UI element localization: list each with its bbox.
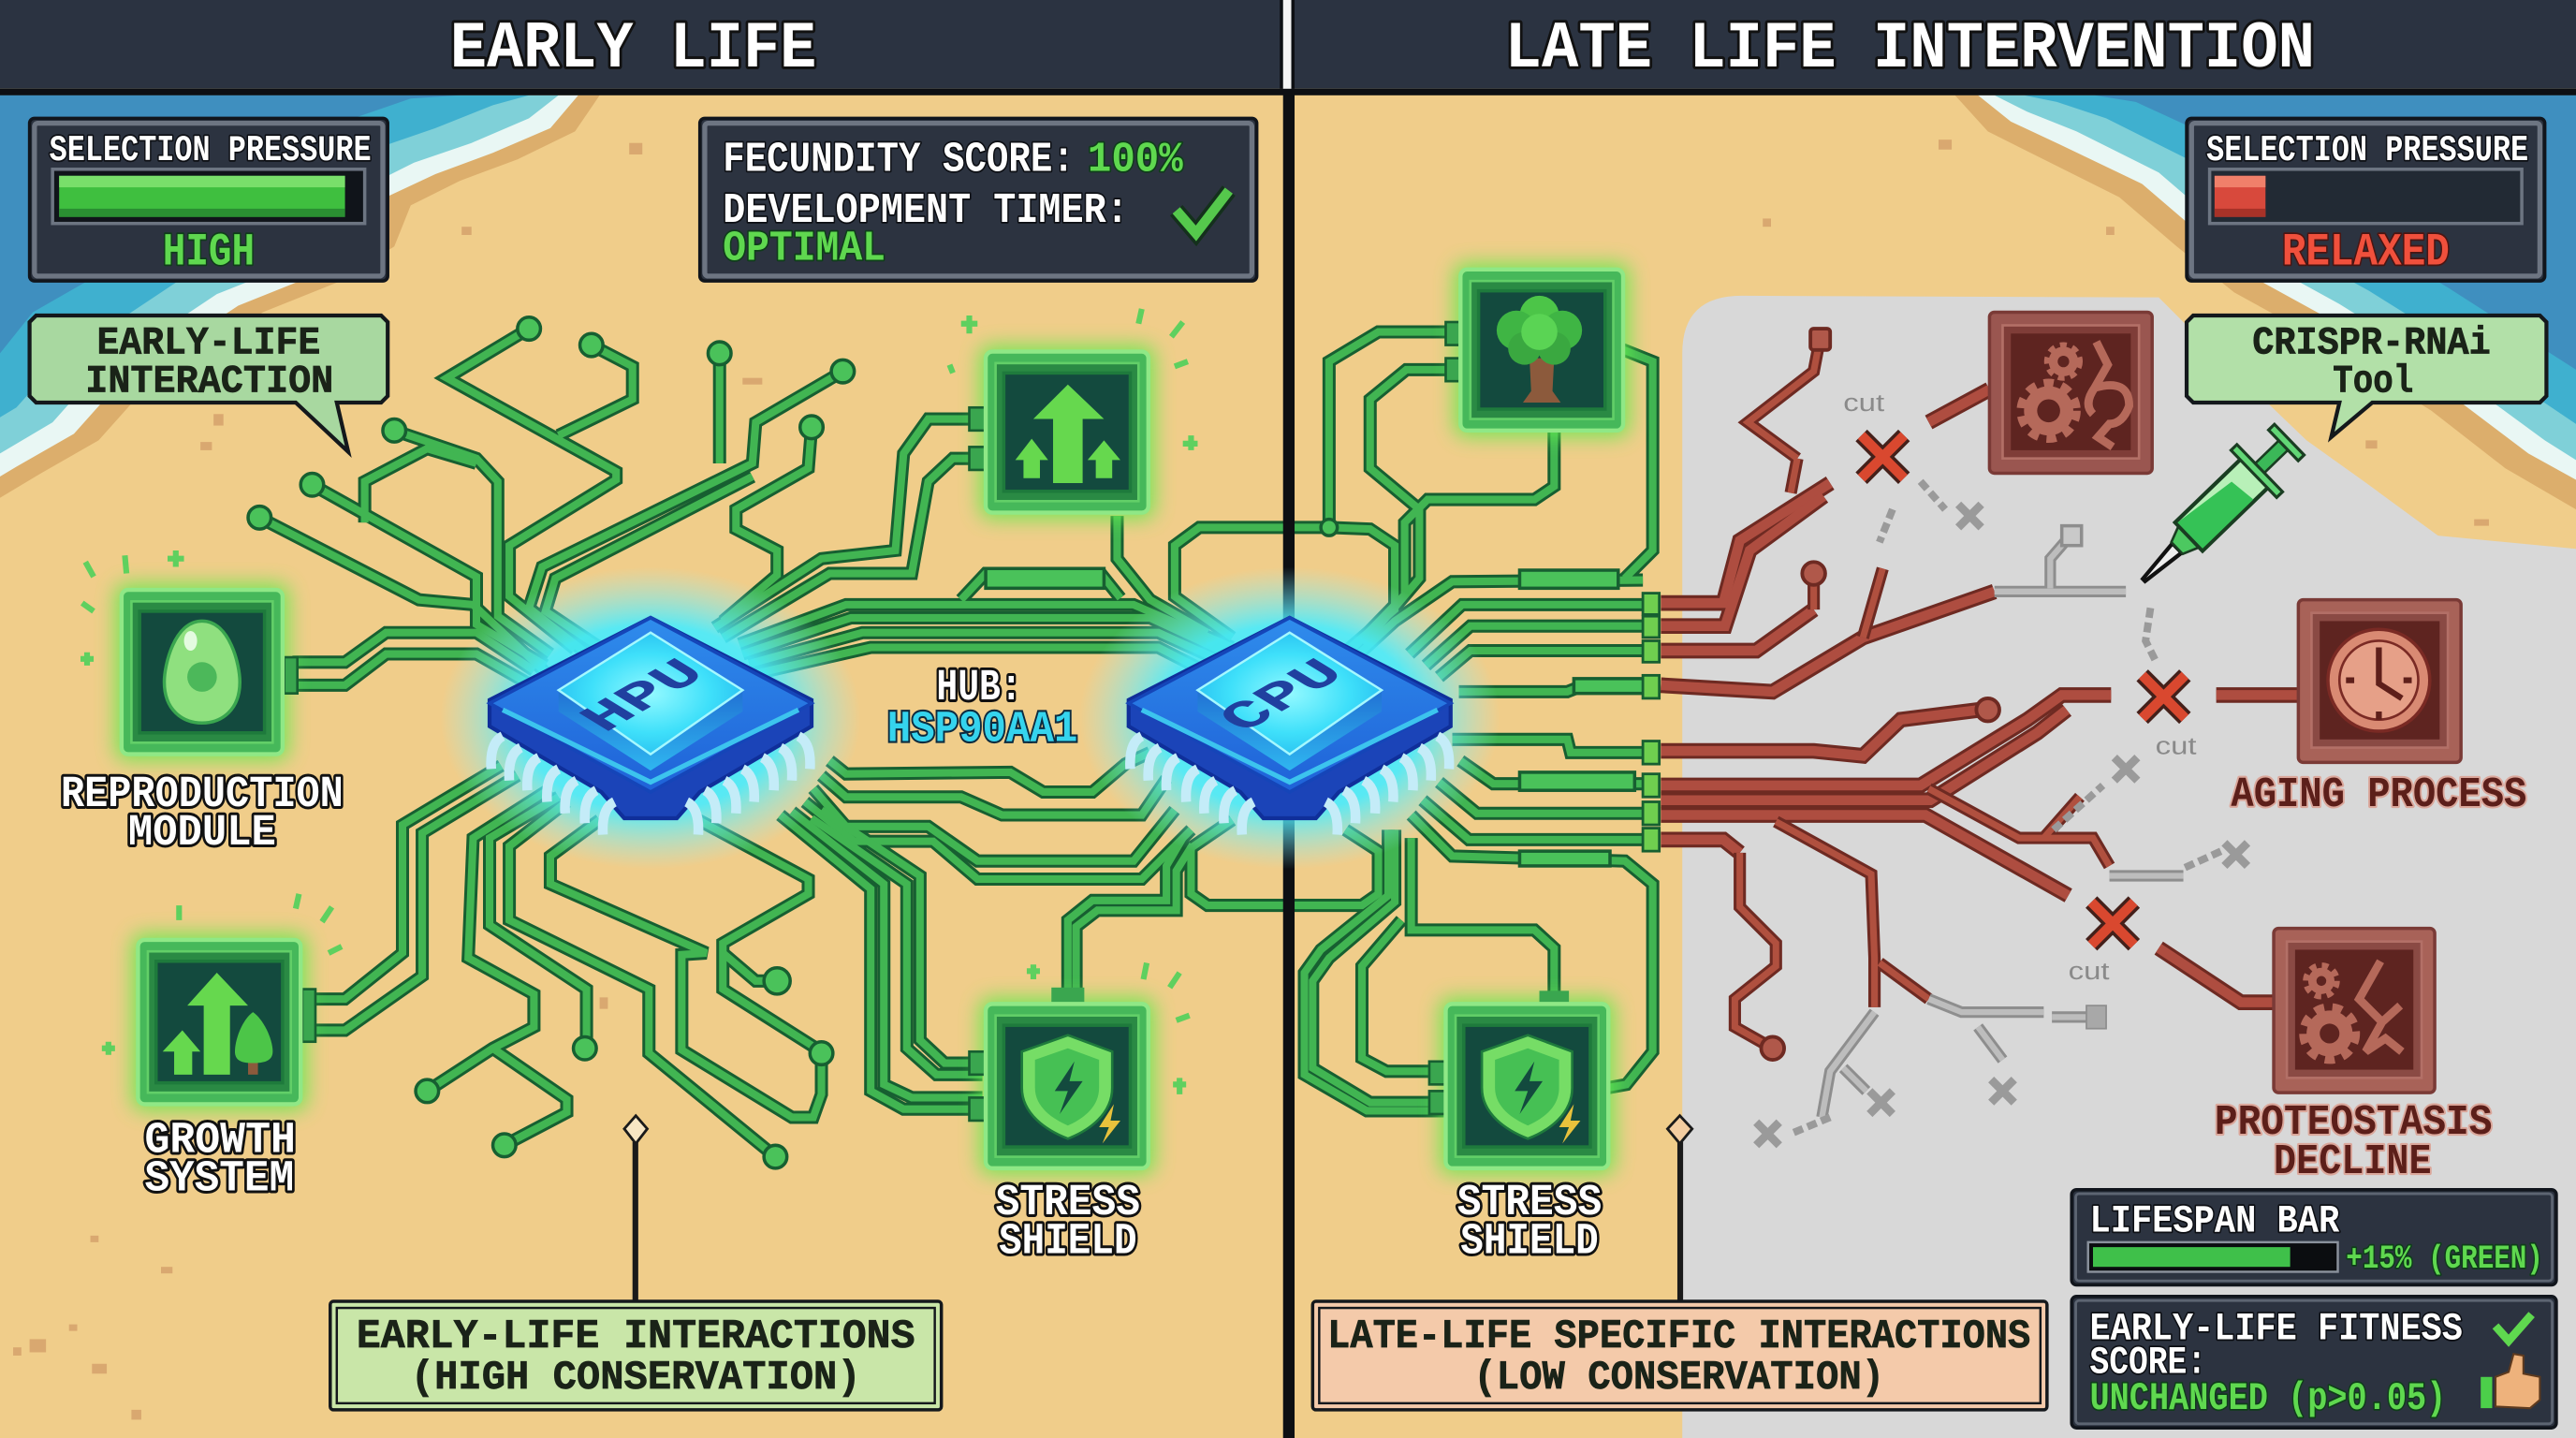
- icon: check mark: [2496, 1314, 2532, 1341]
- panel: fecundity and development: [700, 118, 1257, 281]
- divider: vertical: [1283, 89, 1295, 1438]
- label: growth system: GROWTH: [144, 1116, 296, 1166]
- panel: lifespan bar: [2071, 1190, 2556, 1284]
- panel: early-life fitness: UNCHANGED (p>0.05): [2089, 1376, 2446, 1421]
- module: dysfunctional gears: [1989, 312, 2152, 473]
- title: early life: EARLY LIFE: [450, 13, 816, 87]
- callout: early-life interaction: EARLY-LIFE: [97, 320, 320, 365]
- icon: shield: [1022, 1035, 1120, 1144]
- module: aging clock: [2298, 600, 2461, 762]
- callout: CRISPR-RNAi tool: Tool: [2333, 360, 2413, 404]
- label: stress shield right: [1457, 1179, 1602, 1267]
- icon: three up arrows: [1016, 385, 1120, 483]
- arrow: early-life leader: [624, 1116, 648, 1303]
- icon: gears: [2021, 342, 2130, 447]
- title: late life intervention: LATE LIFE INTERVENTION: [1505, 13, 2315, 87]
- panel: selection pressure relaxed: RELAXED: [2282, 227, 2450, 279]
- panel: lifespan bar: LIFESPAN BAR: [2089, 1198, 2340, 1243]
- icon: clock: [2328, 629, 2430, 731]
- gray inactive traces: [1756, 481, 2247, 1145]
- callout: CRISPR-RNAi tool: CRISPR-RNAi: [2252, 320, 2491, 365]
- label: reproduction module: REPRODUCTION: [61, 770, 344, 820]
- icon: thumbs up: [2481, 1354, 2539, 1408]
- icon: tree: [1497, 296, 1582, 403]
- box: early-life interactions: (HIGH CONSERVATION): [411, 1355, 861, 1401]
- label: proteostasis decline: [2215, 1098, 2492, 1186]
- late-life gray zone: [1682, 296, 2576, 1438]
- label: growth system: SYSTEM: [144, 1155, 294, 1205]
- gauge bar: [2088, 1242, 2338, 1271]
- green trace chips and end nodes: [248, 317, 1647, 1168]
- box: early-life interactions: EARLY-LIFE INTERACTIONS: [357, 1313, 915, 1360]
- label: proteostasis decline: PROTEOSTASIS: [2215, 1098, 2492, 1147]
- label: reproduction module: [61, 770, 344, 858]
- red trace end nodes: [1761, 329, 1999, 1060]
- box: early-life interactions: [330, 1301, 942, 1410]
- module: growth: [131, 933, 315, 1110]
- module: stress shield right: [1429, 990, 1615, 1175]
- panel: fecundity and development: DEVELOPMENT TIMER:: [723, 186, 1129, 235]
- panel: early-life fitness: EARLY-LIFE FITNESS: [2089, 1306, 2463, 1351]
- sparkles: [80, 309, 1197, 1094]
- label: stress shield left: STRESS: [996, 1179, 1140, 1228]
- ocean: top-right shore: [1955, 95, 2576, 509]
- callout: CRISPR-RNAi tool: [2187, 315, 2546, 437]
- syringe: [2121, 416, 2312, 604]
- cut labels: cut: [2156, 732, 2197, 760]
- label: growth system: [144, 1116, 296, 1205]
- icon: check mark: [1177, 191, 1229, 233]
- green connectors at trace hand-off: [1643, 594, 1660, 851]
- label: reproduction module: MODULE: [128, 809, 276, 858]
- panel: selection pressure relaxed: [2187, 118, 2545, 281]
- cut labels: cut: [2069, 957, 2110, 985]
- panel: fecundity and development: FECUNDITY SCORE:: [723, 136, 1075, 184]
- module: upward arrows: [970, 345, 1155, 520]
- module: reproduction: [115, 583, 298, 761]
- gauge bar: [2210, 169, 2522, 224]
- label: proteostasis decline: DECLINE: [2274, 1137, 2432, 1186]
- callout: early-life interaction: INTERACTION: [85, 360, 333, 404]
- panel: fecundity and development: OPTIMAL: [723, 224, 886, 272]
- module: proteostasis gears: [2274, 929, 2435, 1093]
- header bar: [0, 0, 2576, 95]
- ocean: top-left shore: [0, 95, 600, 498]
- cut labels: cut: [1843, 389, 1885, 417]
- red severed traces: [1661, 337, 2298, 1049]
- panel: lifespan bar: +15% (GREEN): [2346, 1240, 2543, 1278]
- label: stress shield left: [996, 1179, 1140, 1267]
- chip glow halos: [440, 567, 1500, 869]
- label: stress shield left: SHIELD: [999, 1217, 1137, 1267]
- gauge bar: [52, 169, 365, 224]
- hub label: [887, 664, 1077, 756]
- chip: CPU: CPU: [1207, 652, 1360, 741]
- cut labels: [1843, 389, 2197, 985]
- module: stress shield left: [970, 988, 1155, 1175]
- box: late-life interactions: [1312, 1301, 2047, 1410]
- icon: broken gears: [2304, 961, 2402, 1060]
- cut marks: red crosses: [1862, 435, 2185, 945]
- icon: growth arrows and tree: [163, 973, 272, 1075]
- label: stress shield right: STRESS: [1457, 1179, 1602, 1228]
- callout: early-life interaction: [30, 315, 388, 452]
- box: late-life interactions: (LOW CONSERVATION): [1473, 1355, 1884, 1401]
- panel: selection pressure high: HIGH: [163, 227, 255, 279]
- label: stress shield right: SHIELD: [1460, 1217, 1599, 1267]
- panel: early-life fitness: SCORE:: [2089, 1340, 2206, 1385]
- icon: egg: [165, 621, 240, 723]
- arrow: late-life leader: [1667, 1116, 1692, 1303]
- panel: selection pressure high: [30, 118, 388, 281]
- box: late-life interactions: LATE-LIFE SPECIFIC INTERACTIONS: [1327, 1313, 2030, 1360]
- panel: fecundity and development: 100%: [1088, 136, 1183, 184]
- chip: CPU: [1129, 618, 1451, 835]
- module: longevity tree: [1445, 263, 1630, 437]
- label: aging process: AGING PROCESS: [2231, 770, 2526, 819]
- green circuit traces: [259, 329, 1653, 1157]
- panel: early-life fitness: [2071, 1297, 2556, 1428]
- panel: selection pressure high: SELECTION PRESSURE: [50, 130, 372, 171]
- hub label: HUB:: [936, 664, 1022, 713]
- hub label: HSP90AA1: [887, 706, 1077, 756]
- chip: HPU: HPU: [567, 652, 721, 741]
- chip: HPU: [490, 618, 812, 835]
- icon: shield: [1482, 1035, 1580, 1144]
